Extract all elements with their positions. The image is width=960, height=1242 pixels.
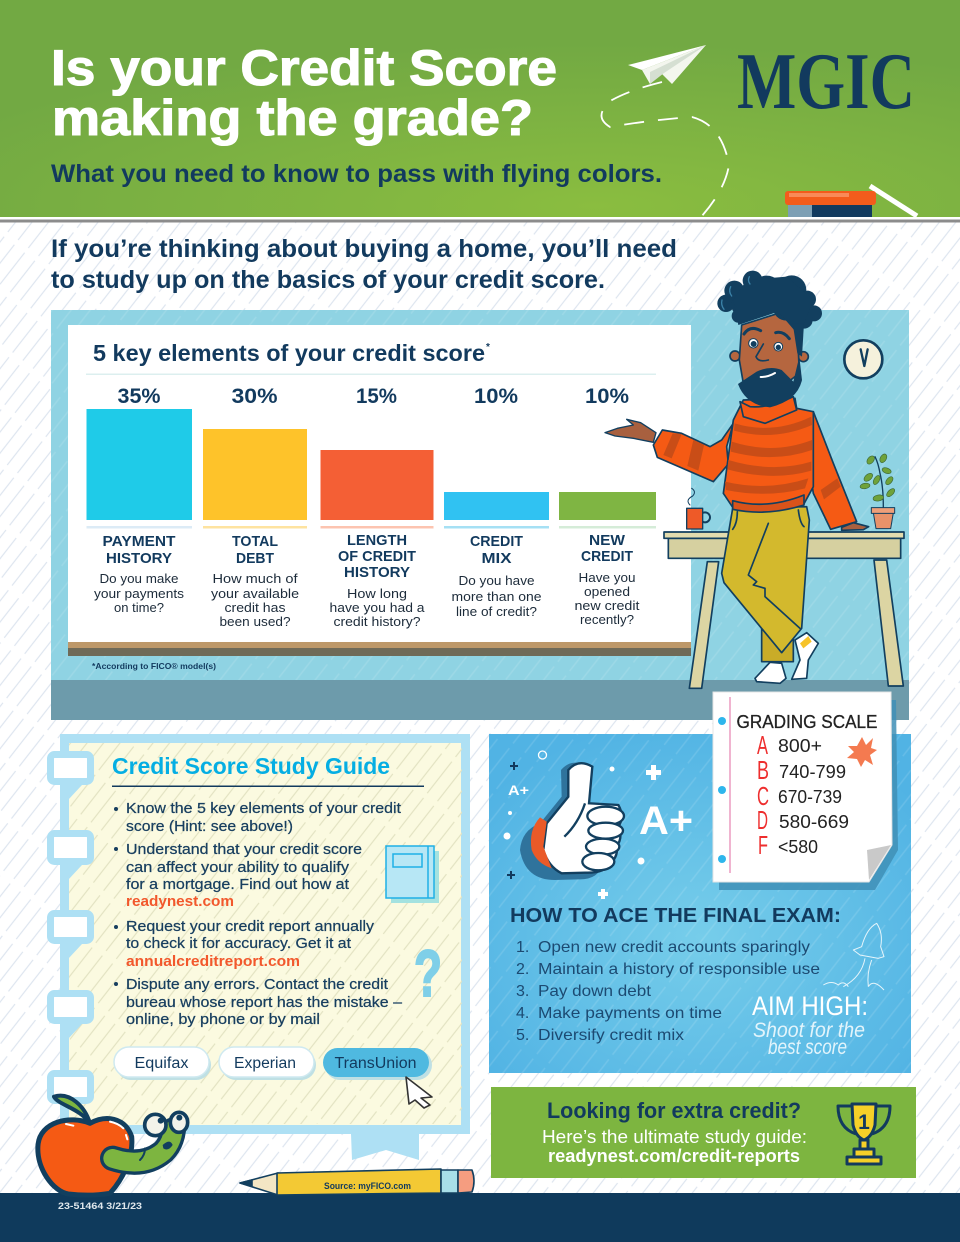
hair bbox=[717, 271, 822, 357]
score ranges bbox=[778, 735, 849, 857]
illustration: teacher at desk bbox=[605, 271, 904, 688]
footnote: *According to FICO® model(s) bbox=[92, 661, 216, 671]
numbered list: Pay down debt bbox=[538, 983, 652, 1000]
panel: extra credit callout bbox=[491, 1087, 916, 1178]
illustration: apple and worm bbox=[38, 1096, 188, 1195]
notebook page bbox=[64, 738, 466, 1130]
percent labels: 35% bbox=[118, 385, 161, 408]
column: payment history: PAYMENT bbox=[102, 533, 176, 550]
exam heading: HOW TO ACE THE FINAL EXAM: bbox=[510, 905, 841, 927]
flight path dashes bbox=[601, 82, 729, 217]
icon: rocket bbox=[823, 923, 884, 990]
percent labels bbox=[118, 385, 629, 408]
aim high chalk text bbox=[752, 991, 868, 1059]
numbered list: 2. bbox=[516, 961, 529, 978]
eyes and nose bbox=[744, 328, 789, 361]
button: TransUnion: TransUnion bbox=[334, 1055, 416, 1072]
beard bbox=[738, 357, 802, 407]
icon: paper plane bbox=[628, 45, 706, 84]
score ranges: <580 bbox=[778, 836, 818, 857]
big A+: A+ bbox=[639, 799, 693, 843]
intro text: to study up on the basics of your credit score. bbox=[51, 266, 605, 294]
icon: wall clock bbox=[844, 340, 882, 378]
subtitle: What you need to know to pass with flying colors. bbox=[51, 160, 662, 188]
column: payment history: your payments bbox=[94, 586, 185, 601]
bullet list: annualcreditreport.com bbox=[126, 953, 300, 970]
icon: trophy: 1 bbox=[858, 1111, 870, 1134]
apple body bbox=[38, 1119, 132, 1195]
score ranges: 580-669 bbox=[779, 811, 849, 832]
column: total debt: How much of bbox=[212, 571, 298, 586]
whiteboard bbox=[68, 325, 691, 656]
man figure bbox=[605, 271, 869, 683]
chart heading: 5 key elements of your credit score bbox=[93, 340, 485, 366]
column: length of credit history bbox=[330, 532, 425, 629]
column: payment history: Do you make bbox=[100, 571, 178, 586]
column: new credit: recently? bbox=[580, 612, 634, 627]
column: credit mix: line of credit? bbox=[456, 604, 537, 619]
percent labels: 10% bbox=[585, 385, 629, 408]
icon: mouse cursor bbox=[406, 1077, 432, 1108]
title bbox=[51, 40, 557, 146]
raised foot bbox=[792, 633, 818, 679]
icon: potted plant bbox=[860, 453, 896, 529]
title: Is your Credit Score bbox=[51, 40, 557, 96]
button: Experian: Experian bbox=[234, 1055, 296, 1072]
icon: trophy bbox=[838, 1104, 890, 1164]
column: length of credit history: How long bbox=[347, 586, 407, 601]
bar chart bbox=[86, 385, 656, 629]
worm eyes bbox=[145, 1112, 188, 1136]
bullet list: score (Hint: see above!) bbox=[126, 818, 293, 835]
callout text bbox=[542, 1127, 807, 1166]
pointing arm bbox=[605, 419, 733, 482]
column: length of credit history: OF CREDIT bbox=[338, 548, 416, 565]
bullet list: Know the 5 key elements of your credit bbox=[126, 800, 402, 817]
right arm bbox=[808, 412, 869, 530]
panel: how to ace the final exam bbox=[489, 734, 911, 1073]
column: new credit: NEW bbox=[589, 532, 626, 549]
desk bbox=[664, 532, 904, 688]
numbered list: 3. bbox=[516, 983, 529, 1000]
callout text: readynest.com/credit-reports bbox=[548, 1146, 800, 1166]
column: total debt bbox=[211, 533, 299, 629]
percent labels: 15% bbox=[356, 385, 397, 408]
percent labels: 10% bbox=[474, 385, 518, 408]
column: length of credit history: have you had a bbox=[330, 600, 425, 615]
column: credit mix: MIX bbox=[482, 550, 512, 567]
numbered list: Open new credit accounts sparingly bbox=[538, 939, 810, 956]
icon: star splat bbox=[847, 737, 877, 767]
sweater torso bbox=[723, 397, 813, 512]
bullet list: to check it for accuracy. Get it at bbox=[126, 935, 352, 952]
column: length of credit history: credit history? bbox=[334, 614, 420, 629]
column: length of credit history: LENGTH bbox=[347, 532, 407, 549]
bullet list: can affect your ability to qualify bbox=[126, 859, 350, 876]
icon: question mark: ? bbox=[414, 936, 442, 1010]
column: total debt: TOTAL bbox=[232, 533, 278, 550]
spiral binding tabs bbox=[50, 754, 90, 1100]
numbered list: 4. bbox=[516, 1005, 529, 1022]
intro text: If you’re thinking about buying a home, you’ll need bbox=[51, 235, 677, 263]
bullet list: readynest.com bbox=[126, 893, 234, 910]
bookmark ribbon bbox=[351, 1134, 419, 1160]
icon: thumbs up bbox=[520, 763, 624, 880]
letter grades: B bbox=[757, 755, 769, 785]
icon: notebook bbox=[386, 846, 439, 903]
score ranges: 800+ bbox=[778, 735, 822, 756]
column: new credit: CREDIT bbox=[581, 548, 633, 565]
title: making the grade? bbox=[52, 90, 533, 146]
bullet list: bureau whose report has the mistake – bbox=[126, 994, 403, 1011]
score ranges: 670-739 bbox=[778, 786, 842, 807]
bullet list: Understand that your credit score bbox=[126, 841, 362, 858]
logo: MGIC: MGIC bbox=[737, 38, 915, 126]
column: total debt: DEBT bbox=[236, 550, 274, 567]
button: Equifax bbox=[114, 1047, 211, 1080]
small A+: A+ bbox=[508, 782, 529, 798]
column: total debt: credit has bbox=[224, 600, 286, 615]
bullet list: for a mortgage. Find out how at bbox=[126, 876, 350, 893]
callout text: Here’s the ultimate study guide: bbox=[542, 1127, 807, 1147]
column: credit mix bbox=[452, 533, 542, 619]
numbered list: 1. bbox=[516, 939, 529, 956]
numbered list: Maintain a history of responsible use bbox=[538, 961, 820, 978]
column: payment history: HISTORY bbox=[106, 550, 172, 567]
letter grades: F bbox=[758, 830, 768, 860]
bullet list bbox=[114, 800, 403, 1028]
column: new credit bbox=[574, 532, 640, 627]
letter grades: A bbox=[757, 730, 768, 760]
grading heading: GRADING SCALE bbox=[736, 711, 878, 732]
callout heading: Looking for extra credit? bbox=[547, 1098, 801, 1123]
column: credit mix: CREDIT bbox=[470, 533, 523, 550]
bars bbox=[86, 409, 656, 528]
column: new credit: new credit bbox=[574, 598, 640, 613]
source text: Source: myFICO.com bbox=[324, 1181, 411, 1192]
numbered list: Diversify credit mix bbox=[538, 1027, 684, 1044]
column: credit mix: more than one bbox=[452, 589, 542, 604]
trousers bbox=[722, 507, 809, 653]
numbered list bbox=[516, 939, 820, 1044]
icon: coffee mug bbox=[687, 488, 710, 529]
column: payment history: on time? bbox=[114, 600, 164, 615]
illustration: pencil bbox=[240, 1169, 474, 1195]
letter grades: D bbox=[757, 805, 768, 835]
button: Equifax: Equifax bbox=[134, 1055, 189, 1072]
face bbox=[739, 313, 799, 393]
study guide heading: Credit Score Study Guide bbox=[112, 753, 390, 779]
letter grades: C bbox=[757, 781, 769, 811]
aim high chalk text: best score bbox=[768, 1036, 847, 1059]
column: payment history bbox=[94, 533, 185, 615]
ears bbox=[730, 351, 808, 362]
column: new credit: Have you bbox=[578, 570, 636, 585]
leaf bbox=[54, 1096, 90, 1123]
numbered list: Make payments on time bbox=[538, 1005, 722, 1022]
aim high chalk text: AIM HIGH: bbox=[752, 991, 868, 1021]
header band bbox=[0, 0, 960, 222]
score ranges: 740-799 bbox=[779, 761, 846, 782]
back leg bbox=[762, 627, 793, 662]
column: length of credit history: HISTORY bbox=[344, 564, 410, 581]
chart heading: * bbox=[486, 342, 490, 353]
footer code: 23-51464 3/21/23 bbox=[58, 1201, 142, 1212]
button: Experian bbox=[219, 1047, 316, 1080]
letter grades bbox=[757, 730, 769, 860]
sparkles bbox=[504, 751, 661, 899]
column: new credit: opened bbox=[584, 584, 630, 599]
column: credit mix: Do you have bbox=[458, 573, 534, 588]
panel: classroom scene bbox=[51, 310, 909, 720]
column: total debt: your available bbox=[211, 586, 299, 601]
percent labels: 30% bbox=[232, 385, 278, 408]
bullet list: online, by phone or by mail bbox=[126, 1011, 320, 1028]
back shoe bbox=[755, 662, 786, 683]
numbered list: 5. bbox=[516, 1027, 529, 1044]
intro text bbox=[51, 235, 677, 294]
worm bbox=[113, 1130, 173, 1162]
smile bbox=[761, 373, 775, 377]
aim high chalk text: Shoot for the bbox=[753, 1019, 865, 1042]
panel: credit score study guide bbox=[50, 738, 466, 1160]
icon: book and chalk bbox=[785, 186, 917, 217]
footer band bbox=[0, 1193, 960, 1242]
card: grading scale bbox=[713, 692, 898, 890]
bullet list: Request your credit report annually bbox=[126, 918, 375, 935]
bullet list: Dispute any errors. Contact the credit bbox=[126, 976, 389, 993]
hair curls highlight bbox=[722, 277, 750, 309]
column: total debt: been used? bbox=[220, 614, 290, 629]
button: TransUnion bbox=[323, 1048, 432, 1080]
